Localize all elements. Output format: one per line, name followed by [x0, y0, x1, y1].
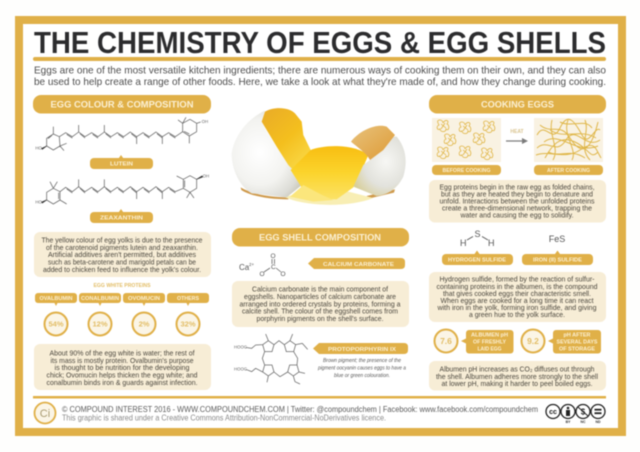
caption: protoporphyrin IX: blue or green colouration.	[334, 373, 390, 379]
label: lutein: LUTEIN	[110, 162, 133, 168]
molecule: zeaxanthin: HO	[35, 200, 42, 205]
text box: yolk colour: The yellow colour of egg yolks is due to the presence	[42, 236, 202, 244]
molecule: calcium carbonate	[239, 253, 286, 278]
molecule: lutein	[35, 117, 208, 151]
text box: egg white: chick; Ovomucin helps thicken the egg white; and	[46, 370, 198, 380]
stat: pH 9.2: 9.2	[527, 336, 539, 346]
text box: calcium carbonate	[232, 281, 409, 327]
text box: proteins: create a three-dimensional network, trapping the	[442, 203, 592, 212]
label: protoporphyrin IX	[313, 343, 408, 354]
molecule: protoporphyrin IX: HOOC	[234, 367, 247, 372]
text box: hydrogen sulfide: that gives cooked eggs their characteristic smell.	[443, 289, 591, 298]
label: hydrogen sulfide	[442, 250, 513, 265]
stat: pH 7.6: LAID EGG	[478, 346, 502, 352]
footer text: This graphic is shared under a Creative Commons Attribution-NonCommercial-NoDerivatives licence.	[62, 414, 386, 422]
text box: egg white: is thought to be nutrition for the developing	[54, 363, 190, 372]
label: calcium carbonate: CALCIUM CARBONATE	[323, 262, 394, 268]
panel: egg colour and composition	[33, 95, 211, 390]
heading: egg shell composition	[232, 228, 409, 246]
text box: calcium carbonate: eggshells. Nanoparticles of calcium carbonate are	[244, 292, 396, 301]
molecule: hydrogen sulfide: S	[474, 229, 481, 239]
footer text: © COMPOUND INTEREST 2016 - WWW.COMPOUNDCHEM.COM | Twitter: @compoundchem | Facebook: www.facebook.com/compoundchem	[62, 405, 538, 414]
protein: ovalbumin	[35, 293, 77, 336]
protein: ovalbumin: OVALBUMIN	[40, 296, 73, 302]
stat: pH 7.6: OF FRESHLY	[473, 340, 506, 346]
molecule: hydrogen sulfide	[460, 229, 494, 248]
molecule: protoporphyrin IX	[234, 334, 308, 384]
caption: protoporphyrin IX	[317, 358, 406, 379]
text box: yolk colour	[34, 232, 211, 277]
icon: creative commons licence badges: BY	[566, 420, 571, 424]
text box: albumen pH	[429, 361, 606, 390]
label: before cooking: BEFORE COOKING	[442, 168, 490, 174]
molecule: hydrogen sulfide: H	[460, 238, 466, 248]
icon: creative commons licence badges: ND	[595, 420, 601, 424]
stat: pH 9.2: OF STORAGE	[559, 346, 595, 352]
stat: pH 9.2: pH AFTER	[564, 332, 591, 338]
stat: pH 7.6: ALBUMEN pH	[471, 332, 508, 338]
text box: yolk colour: Artificial additives aren't permitted, but additives	[48, 250, 196, 259]
text box: egg white: conalbumin binds iron & guards against infection.	[46, 378, 198, 387]
molecule: calcium carbonate: C	[271, 264, 276, 271]
intro text: be used to help create a range of other foods. Here, we take a look at what they're made of, and how they change during cooking.	[34, 77, 606, 88]
icon: compound interest logo: Ci	[40, 408, 50, 420]
protein: others: 32%	[180, 320, 196, 328]
molecule: calcium carbonate: Ca	[239, 263, 250, 272]
arrow: heat: HEAT	[510, 129, 524, 135]
molecule: calcium carbonate: 2+	[249, 262, 255, 267]
stat: pH 7.6	[434, 330, 514, 354]
footer	[33, 396, 606, 424]
title rule	[33, 57, 606, 61]
photo: cracked egg	[232, 108, 406, 205]
molecule: calcium carbonate: O	[280, 271, 286, 278]
label: lutein	[90, 155, 153, 169]
text box: egg white: About 90% of the egg white is water; the rest of	[50, 348, 194, 358]
intro text: Eggs are one of the most versatile kitchen ingredients; there are numerous ways of cooking them on their own, and they can also	[34, 66, 606, 76]
icon: creative commons licence badges	[546, 404, 605, 424]
molecule: protoporphyrin IX: HOOC	[234, 345, 247, 350]
text box: calcium carbonate: porphyrin pigments on the shell's surface.	[256, 314, 384, 323]
caption: protoporphyrin IX: pigment oocyanin causes eggs to have a	[317, 366, 406, 372]
panel: egg shell composition	[232, 228, 409, 384]
label: protoporphyrin IX: PROTOPORPHYRIN IX	[328, 347, 396, 353]
protein: ovalbumin: 54%	[48, 320, 64, 328]
text box: egg white	[34, 344, 211, 390]
text box: egg white: its mass is mostly protein. Ovalbumin's purpose	[50, 356, 194, 365]
diagram: folded proteins before cooking	[432, 118, 501, 162]
text box: hydrogen sulfide: Hydrogen sulfide, formed by the reaction of sulfur-	[440, 274, 595, 284]
label: zeaxanthin	[90, 209, 153, 223]
molecule: zeaxanthin: OH	[203, 173, 209, 178]
molecule: zeaxanthin	[35, 173, 209, 205]
label: before cooking	[432, 165, 501, 175]
molecule: hydrogen sulfide: H	[488, 238, 494, 248]
protein: others: OTHERS	[177, 296, 199, 302]
diagram: unfolded protein network after cooking	[534, 118, 603, 162]
icon: creative commons licence badges: cc	[549, 409, 557, 416]
text box: hydrogen sulfide: a green hue to the yolk surface.	[469, 310, 565, 319]
heading: egg colour and composition: EGG COLOUR & COMPOSITION	[50, 100, 194, 110]
protein: ovomucin	[123, 293, 165, 336]
stat: pH 9.2	[522, 330, 601, 354]
protein: ovomucin: 2%	[139, 320, 150, 328]
molecule: calcium carbonate: O	[260, 271, 265, 278]
text box: hydrogen sulfide: When eggs are cooked for a long time it can react	[440, 296, 594, 305]
molecule: calcium carbonate: O	[270, 253, 276, 260]
text box: albumen pH: Albumen pH increases as CO₂ diffuses out through	[440, 364, 594, 374]
icon: compound interest logo	[34, 402, 56, 424]
text box: proteins: Egg proteins begin in the raw egg as folded chains,	[440, 182, 594, 192]
text box: yolk colour: added to chicken feed to influence the yolk's colour.	[43, 265, 201, 274]
text box: calcium carbonate: Calcium carbonate is the main component of	[252, 284, 388, 294]
text box: proteins	[429, 180, 606, 222]
caption: protoporphyrin IX: Brown pigment; the presence of the	[323, 358, 401, 364]
text box: yolk colour: of the carotenoid pigments lutein and zeaxanthin.	[46, 243, 198, 252]
arrow: heat	[506, 129, 528, 144]
heading: cooking eggs	[429, 95, 606, 114]
stat: pH 9.2: SEVERAL DAYS	[556, 340, 598, 346]
icon: creative commons licence badges: $	[581, 408, 586, 416]
text box: calcium carbonate: arranged into ordered crystals by proteins, forming a	[240, 299, 401, 308]
label: calcium carbonate	[308, 258, 405, 269]
protein: conalbumin	[79, 293, 121, 336]
text box: hydrogen sulfide	[429, 272, 606, 322]
label: hydrogen sulfide: HYDROGEN SULFIDE	[448, 258, 506, 264]
protein: conalbumin: 12%	[92, 320, 108, 328]
subheading: egg white proteins: EGG WHITE PROTEINS	[94, 283, 151, 289]
label: zeaxanthin: ZEAXANTHIN	[100, 216, 143, 222]
text box: albumen pH: the shell. Albumen adheres more strongly to the shell	[436, 372, 598, 381]
stat: pH 7.6: 7.6	[440, 336, 452, 346]
protein: ovomucin: OVOMUCIN	[128, 296, 160, 302]
text box: proteins: water and causing the egg to solidify.	[460, 210, 574, 220]
heading: egg colour and composition	[33, 95, 211, 114]
text box: proteins: but as they are heated they begin to denature and	[441, 190, 593, 198]
text box: hydrogen sulfide: containing proteins in the albumen, is the compound	[436, 282, 598, 291]
protein: conalbumin: CONALBUMIN	[81, 296, 119, 302]
panel: cooking eggs	[429, 95, 606, 390]
footer text	[62, 405, 538, 422]
intro text	[34, 66, 606, 88]
label: iron sulfide: IRON (II) SULFIDE	[533, 258, 582, 264]
molecule: lutein: OH	[202, 119, 208, 124]
molecule: iron sulfide: FeS	[549, 234, 565, 244]
label: iron sulfide	[522, 250, 593, 265]
text box: proteins: unfold. Interactions between the unfolded proteins	[440, 196, 595, 206]
text box: yolk colour: such as beta-carotene and marigold petals can be	[48, 258, 196, 266]
protein: others	[167, 293, 209, 336]
text box: hydrogen sulfide: with iron in the yolk, forming iron sulfide, and giving	[437, 303, 596, 312]
text box: albumen pH: at lower pH, making it harder to peel boiled eggs.	[442, 379, 593, 388]
molecule: lutein: HO	[35, 145, 42, 150]
text box: calcium carbonate: calcite shell. The colour of the eggshell comes from	[242, 306, 398, 316]
heading: egg shell composition: EGG SHELL COMPOSITION	[259, 232, 381, 244]
label: after cooking	[534, 165, 603, 175]
label: after cooking: AFTER COOKING	[547, 168, 590, 174]
heading: cooking eggs: COOKING EGGS	[481, 100, 554, 110]
icon: creative commons licence badges: NC	[580, 420, 586, 424]
